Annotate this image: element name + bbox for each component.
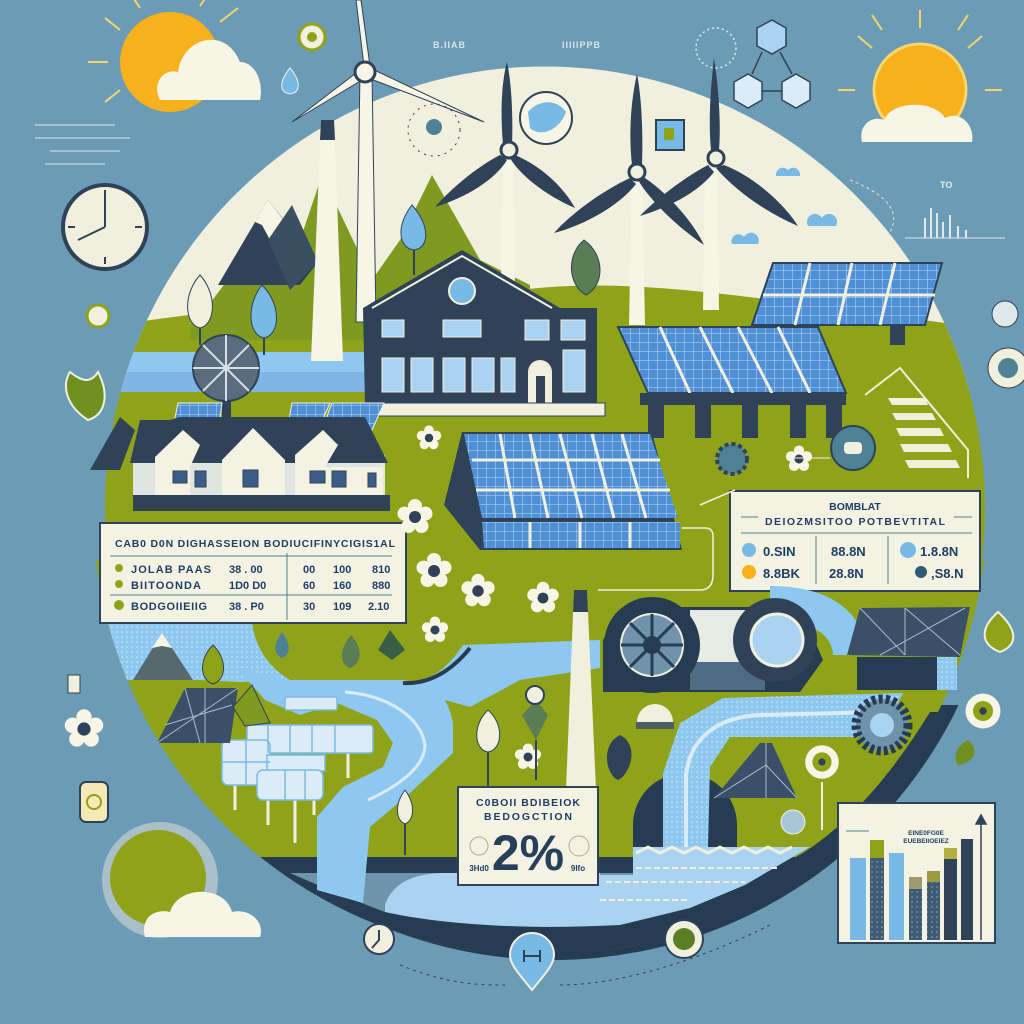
gable fronts <box>155 430 200 495</box>
light walls <box>133 455 385 495</box>
globe icon <box>520 92 572 144</box>
stairs <box>865 368 968 478</box>
side panel <box>90 417 135 470</box>
mini right chart <box>850 180 1005 240</box>
plants <box>275 630 631 855</box>
connector arrows <box>598 490 735 590</box>
legend values: ,S8.N <box>931 566 964 581</box>
bottom timeline markers <box>364 920 770 990</box>
dark roofs <box>130 417 388 463</box>
dotted target icon <box>408 104 460 156</box>
chimney top <box>311 120 343 361</box>
dark school building <box>355 250 605 416</box>
table rows: JOLAB PAAS <box>131 564 211 576</box>
cream callout: carbon reduction percent: BEDOGCTION <box>484 811 572 823</box>
rooftop solar <box>172 403 384 433</box>
left lake <box>120 352 364 392</box>
dark arch behind right waterfall <box>633 773 737 847</box>
turbine 2 <box>435 62 575 285</box>
cream callout: carbon reduction percent: 9Ifo <box>571 864 585 873</box>
table rows: 880 <box>372 580 390 592</box>
table rows: 2.10 <box>368 601 389 613</box>
turbine large left <box>292 0 484 322</box>
grey-blue inner area <box>290 873 633 927</box>
legend values <box>742 542 964 581</box>
small header labels <box>433 40 601 50</box>
table rows: 160 <box>333 580 351 592</box>
cream info panel: global potential <box>730 491 980 591</box>
house windows <box>173 470 376 487</box>
row of houses <box>90 403 390 511</box>
table rows: 30 <box>303 601 315 613</box>
sky trees <box>188 205 600 355</box>
green land <box>90 286 1000 950</box>
table rows: 810 <box>372 564 390 576</box>
canopy solar array <box>618 327 846 438</box>
right edge icons <box>956 301 1024 765</box>
table rows: 38 . 00 <box>229 564 263 576</box>
table rows: 1D0 D0 <box>229 580 266 592</box>
dark fence <box>133 495 390 511</box>
panel heading: CAB0 D0N DIGHASSEION BODIUCIFINYCIGIS1AL <box>115 538 396 550</box>
central solar field <box>444 432 682 550</box>
bar chart card <box>838 803 995 943</box>
table rows: BODGOIIEIIG <box>131 601 207 613</box>
mountains <box>218 200 318 290</box>
table rows <box>114 564 390 613</box>
dish wind rotor <box>193 335 259 427</box>
circular scene rim <box>393 705 958 960</box>
lower-right rim wedge <box>640 712 955 952</box>
small header labels: IIIIIPPB <box>562 40 601 50</box>
chimney lower <box>566 590 596 790</box>
machine turbine cylinder <box>603 597 823 693</box>
bottom navy band <box>260 857 796 950</box>
mountain in left water <box>133 633 224 684</box>
legend values: 88.8N <box>831 544 866 559</box>
sun and cloud top right <box>838 10 1002 142</box>
small device icon <box>656 120 684 150</box>
rear solar array top right <box>752 263 942 345</box>
legend values: 28.8N <box>829 566 864 581</box>
left edge leaf and badge icons <box>65 305 109 822</box>
main lower water channel <box>237 603 850 903</box>
bars <box>850 839 973 940</box>
sky <box>121 66 969 390</box>
green hills <box>190 175 530 340</box>
bar chart card: EUEBEIIOEIEZ <box>903 838 949 845</box>
right water channel <box>385 693 903 927</box>
sun and cloud bottom left <box>102 822 261 938</box>
sun and cloud top left <box>88 0 261 112</box>
gears <box>717 426 875 474</box>
water drop and leaf icons top <box>282 24 325 94</box>
small header labels: B.IIAB <box>433 40 466 50</box>
faint text lines left <box>35 125 130 164</box>
table rows: 38 . P0 <box>229 601 264 613</box>
callout footnotes: 3Hd0 <box>469 864 489 873</box>
panel heading: BOMBLAT <box>829 501 881 513</box>
cream callout: carbon reduction percent <box>458 787 598 885</box>
table rows: 00 <box>303 564 315 576</box>
legend values: 8.8BK <box>763 566 800 581</box>
small clouds <box>731 168 837 244</box>
hexagon molecule icon <box>696 20 810 108</box>
table rows: 60 <box>303 580 315 592</box>
dark pyramid right <box>714 607 970 798</box>
dark pyramid shelter left <box>157 685 270 743</box>
flowers <box>398 425 559 769</box>
right gear wheels <box>636 699 908 834</box>
axis arrow <box>976 815 986 940</box>
callout heading: C0BOII BDIBEIOK <box>476 797 580 809</box>
left solar ice blocks <box>222 697 373 843</box>
table rows: 109 <box>333 601 351 613</box>
cream info panel: carbon reduction table <box>100 523 406 623</box>
callout figure: 2% <box>492 825 564 881</box>
mini right chart: TO <box>940 180 952 190</box>
legend values: 0.SIN <box>763 544 796 559</box>
chart caption: EINE0FG0E <box>908 830 945 837</box>
clock <box>63 185 147 269</box>
legend values: 1.8.8N <box>920 544 958 559</box>
cream info panel: global potential: DEIOZMSITOO POTBEVTITAL <box>765 516 946 528</box>
table rows: BIITOONDA <box>131 580 201 592</box>
turbine 4 <box>640 58 798 310</box>
table rows: 100 <box>333 564 351 576</box>
turbine 3 <box>554 74 704 325</box>
dotted water top-left <box>108 624 290 682</box>
